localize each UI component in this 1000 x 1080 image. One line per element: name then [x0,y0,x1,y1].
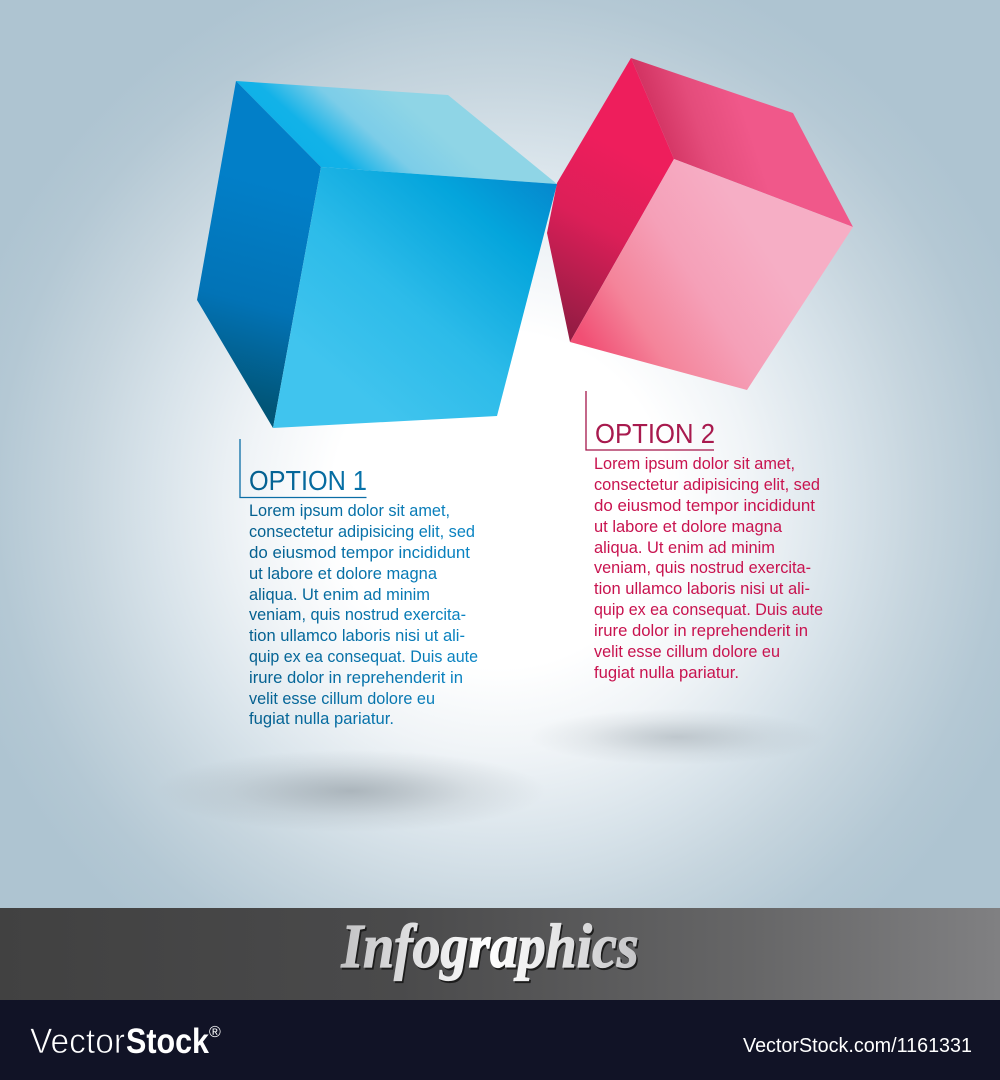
option 1 text: consectetur adipisicing elit, sed [249,523,475,541]
blue cube [197,81,557,428]
option 1 heading [240,439,367,498]
option 1 text: velit esse cillum dolore eu [249,690,435,708]
option 1 text: tion ullamco laboris nisi ut ali- [249,627,465,645]
option 1 heading: OPTION 1 [249,465,367,496]
title band [0,908,1000,1000]
option 2 text: quip ex ea consequat. Duis aute [594,601,823,619]
option 2 text: Lorem ipsum dolor sit amet, [594,455,795,473]
option 2 text: veniam, quis nostrud exercita- [594,559,811,577]
option 2 text: fugiat nulla pariatur. [594,664,739,682]
title: Infographics: Infographics [342,915,640,983]
option 2 text: tion ullamco laboris nisi ut ali- [594,580,810,598]
option 1 text [249,502,478,728]
footer bar [0,1000,1000,1080]
option 2 text [594,455,823,682]
option 1 text: Lorem ipsum dolor sit amet, [249,502,450,520]
pink cube [547,58,853,390]
option 2 text: consectetur adipisicing elit, sed [594,476,820,494]
option 1 text: quip ex ea consequat. Duis aute [249,648,478,666]
footer url: VectorStock.com/1161331 [743,1035,972,1057]
option 2 text: do eiusmod tempor incididunt [594,497,815,515]
shadow: option 2 cube [529,709,825,765]
option 1 text: do eiusmod tempor incididunt [249,544,470,562]
registered mark: ® [209,1024,221,1041]
option 1 text: veniam, quis nostrud exercita- [249,606,466,624]
option 2 text: irure dolor in reprehenderit in [594,622,808,640]
footer logo: Stock [126,1022,209,1061]
footer logo [30,1022,209,1061]
option 1 text: ut labore et dolore magna [249,565,438,583]
option 2 heading: OPTION 2 [595,418,715,449]
option 1 text: aliqua. Ut enim ad minim [249,586,430,604]
option 2 text: ut labore et dolore magna [594,518,783,536]
option 2 text: velit esse cillum dolore eu [594,643,780,661]
option 1 text: fugiat nulla pariatur. [249,710,394,728]
option 2 heading [586,391,715,450]
footer logo: Vector [30,1022,125,1061]
shadow: option 1 cube [156,750,546,832]
option 1 text: irure dolor in reprehenderit in [249,669,463,687]
option 2 text: aliqua. Ut enim ad minim [594,539,775,557]
title: Infographics: Infographics [341,913,638,981]
